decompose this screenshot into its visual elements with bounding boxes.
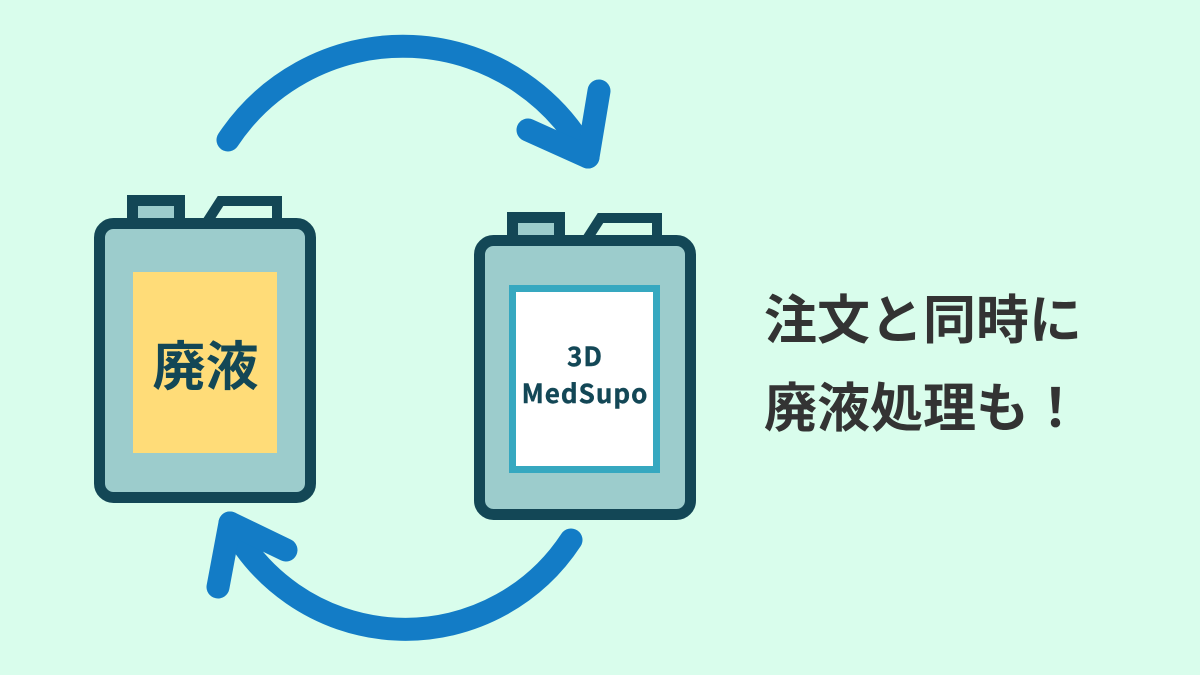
3D MedSupo label: MedSupo [522, 374, 648, 411]
arrow: bottom curved arrow from new can to waste can [218, 523, 571, 629]
waste label: 廃液 [152, 325, 258, 401]
icon: 3D MedSupo canister [480, 218, 690, 514]
3D MedSupo label: 3D [567, 337, 603, 374]
3D MedSupo label [512, 288, 656, 470]
waste label [133, 272, 277, 453]
text block: headline: 注文と同時に [764, 278, 1082, 354]
arrow: top curved arrow from waste can to new can [228, 46, 599, 157]
text block: headline [764, 278, 1082, 442]
icon: waste liquid canister [100, 200, 310, 498]
text block: headline: 廃液処理も！ [764, 366, 1082, 442]
